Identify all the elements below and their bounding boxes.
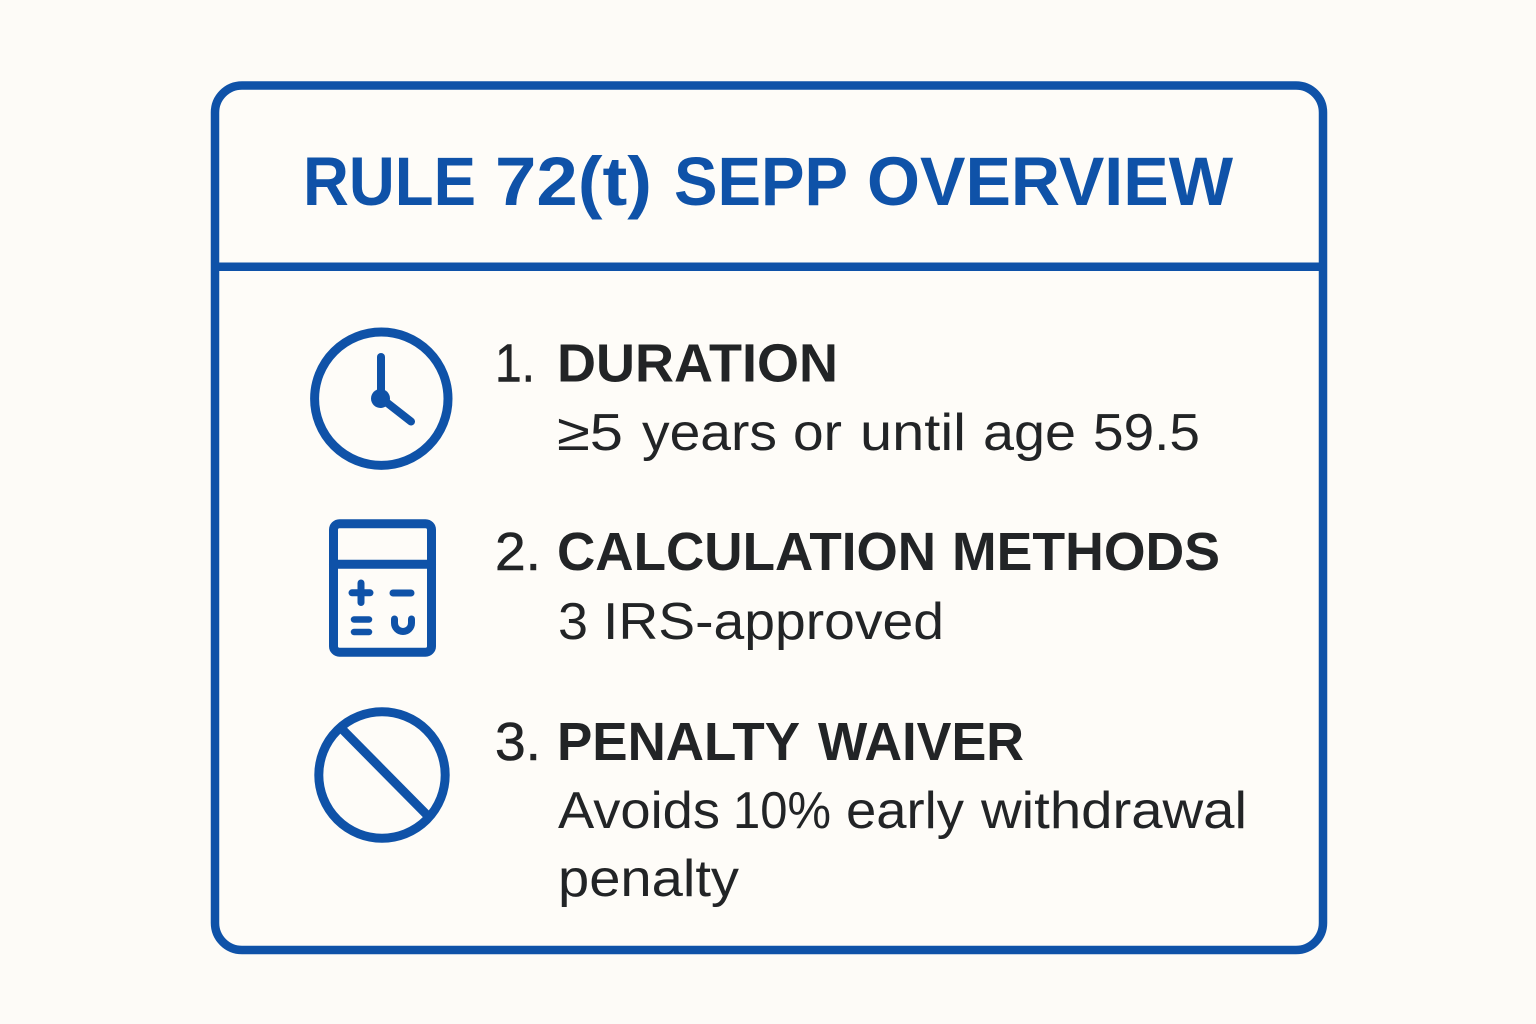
- title: RULE: [303, 143, 476, 220]
- title: SEPP: [674, 143, 848, 220]
- item 1: duration: 1.: [495, 334, 535, 394]
- icon: calculator: [334, 524, 432, 652]
- item 1: duration: 59.5: [1093, 404, 1200, 462]
- item 3: penalty waiver: [495, 712, 1247, 908]
- item 3: penalty waiver: 10%: [733, 782, 831, 840]
- icon: prohibited sign: [319, 712, 445, 838]
- item 2: calculation methods: CALCULATION: [557, 522, 936, 582]
- item 3: penalty waiver: 3.: [495, 712, 541, 772]
- item 2: calculation methods: [495, 522, 1220, 651]
- panel: overview card: [215, 86, 1323, 950]
- item 3: penalty waiver: Avoids: [558, 782, 720, 840]
- item 3: penalty waiver: WAIVER: [818, 712, 1024, 772]
- title: 72(t): [495, 143, 652, 220]
- title: OVERVIEW: [867, 143, 1234, 220]
- item 1: duration: years: [642, 404, 777, 462]
- item 2: calculation methods: METHODS: [952, 522, 1220, 582]
- icon: clock: [315, 332, 448, 465]
- title: [303, 143, 1234, 220]
- item 3: penalty waiver: withdrawal: [980, 782, 1247, 840]
- item 3: penalty waiver: penalty: [558, 850, 739, 908]
- item 2: calculation methods: IRS-approved: [603, 593, 944, 651]
- item 1: duration: age: [983, 404, 1076, 462]
- item 1: duration: or: [793, 404, 842, 462]
- item 3: penalty waiver: PENALTY: [557, 712, 800, 772]
- item 1: duration: ≥5: [557, 404, 623, 462]
- item 2: calculation methods: 2.: [495, 522, 541, 582]
- item 1: duration: until: [860, 404, 966, 462]
- item 1: duration: DURATION: [557, 334, 838, 394]
- item 3: penalty waiver: early: [846, 782, 964, 840]
- item 2: calculation methods: 3: [558, 593, 588, 651]
- item 1: duration: [495, 334, 1200, 462]
